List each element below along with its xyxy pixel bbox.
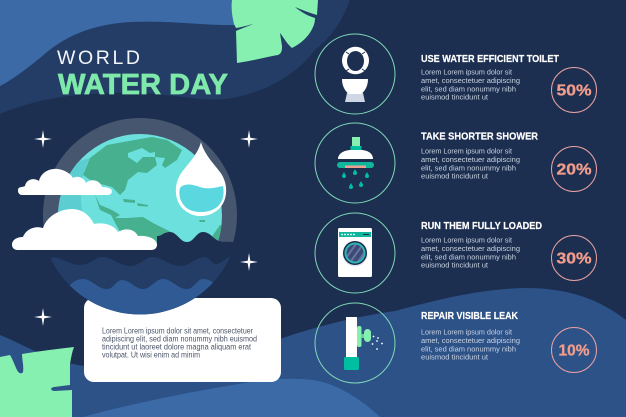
title: water day: WATER DAY: [58, 69, 228, 101]
icon: shower: [337, 137, 374, 189]
globe halo: [43, 118, 237, 246]
background wave: bottom mid band: [0, 288, 626, 417]
icon circle: [315, 303, 395, 383]
row 4: leak: [315, 303, 596, 383]
leaf: top right: [232, 0, 318, 63]
body text: elit, sed diam nonummy nibh: [421, 344, 516, 354]
row 3: washer: [315, 213, 596, 293]
icon: toilet: [342, 47, 369, 102]
heading: USE WATER EFFICIENT TOILET: [421, 54, 559, 65]
body text: amet, consectetuer adipiscing: [421, 336, 520, 345]
leaf: bottom left: [0, 347, 74, 417]
text block: [102, 326, 257, 360]
body text: euismod tincidunt ut: [421, 352, 489, 362]
icon circle: [315, 34, 395, 114]
percent badge: [552, 68, 596, 112]
row 2: shower: [315, 123, 596, 203]
heading: RUN THEM FULLY LOADED: [421, 221, 542, 232]
cloud: upper: [18, 169, 112, 195]
body text: Lorem Lorem ipsum dolor sit: [421, 68, 513, 76]
star: [34, 130, 52, 148]
heading: REPAIR VISIBLE LEAK: [421, 311, 519, 322]
percent badge: 50%: [556, 82, 592, 100]
text block: adipiscing elit, sed diam nonummy nibh euismod: [102, 334, 257, 344]
body text: amet, consectetuer adipiscing: [421, 244, 520, 253]
background wave: top mid band: [0, 0, 350, 114]
body text: [421, 328, 520, 362]
body text: euismod tincidunt ut: [421, 172, 489, 180]
lower water bands: [51, 257, 230, 314]
body text: Lorem Lorem ipsum dolor sit: [421, 146, 513, 156]
percent badge: 20%: [556, 162, 592, 178]
globe illustration: [12, 118, 240, 320]
body text: [421, 146, 520, 180]
icon circle: [315, 213, 395, 293]
body text: amet, consectetuer adipiscing: [421, 76, 520, 85]
body text: euismod tincidunt ut: [421, 260, 489, 270]
body text: elit, sed diam nonummy nibh: [421, 84, 516, 94]
panel: text box: [84, 298, 281, 382]
background wave: bottom light band: [83, 379, 380, 417]
text block: Lorem Lorem ipsum dolor sit amet, consectetuer: [102, 326, 253, 336]
body text: euismod tincidunt ut: [421, 92, 489, 102]
body text: [421, 236, 520, 270]
body text: [421, 68, 520, 102]
continents: [58, 137, 222, 244]
star: [240, 253, 258, 271]
heading: TAKE SHORTER SHOWER: [421, 132, 539, 142]
icon: leaking pipe: [344, 317, 382, 370]
background wave: top light band: [0, 0, 240, 86]
star: [240, 130, 258, 148]
percent badge: [552, 236, 596, 280]
cloud: lower: [12, 209, 157, 250]
percent badge: 10%: [558, 342, 590, 360]
star: [34, 308, 52, 326]
percent badge: [552, 328, 596, 372]
globe ocean: [58, 134, 222, 246]
body text: Lorem Lorem ipsum dolor sit: [421, 236, 513, 244]
body text: amet, consectetuer adipiscing: [421, 155, 520, 164]
body text: Lorem Lorem ipsum dolor sit: [421, 328, 513, 336]
percent badge: [552, 146, 596, 192]
water drop: [176, 142, 226, 216]
title: world: WORLD: [57, 47, 140, 69]
body text: elit, sed diam nonummy nibh: [421, 164, 516, 172]
row 1: toilet: [315, 34, 596, 114]
text block: volutpat. Ut wisi enim ad minim: [102, 350, 200, 360]
title: [57, 47, 228, 101]
text block: tincidunt ut laoreet dolore magna aliquam erat: [102, 342, 252, 352]
icon circle: [315, 123, 395, 203]
body text: elit, sed diam nonummy nibh: [421, 252, 516, 262]
percent badge: 30%: [556, 250, 592, 268]
icon: washing machine: [338, 228, 372, 277]
